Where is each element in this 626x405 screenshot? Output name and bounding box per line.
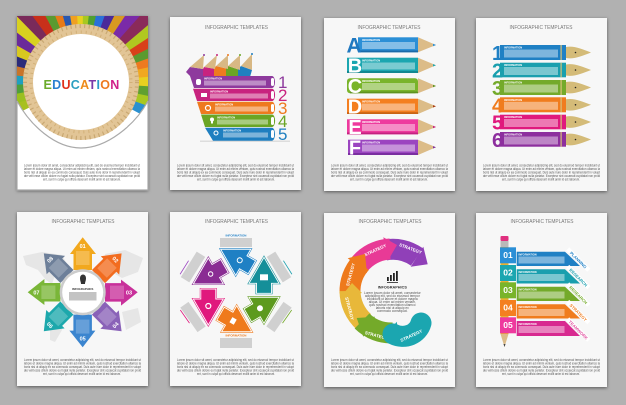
- body text: ent, sunt in culpa qui officia deserunt mollit anim id est laborum.: [43, 372, 121, 376]
- segment purple: STRATEGY: [399, 242, 423, 255]
- pen 2: 2: [492, 60, 503, 82]
- body text: ate velit esse cillum dolore eu fugiat nulla pariatur. Excepteur sint occaecat cupidatat non proid: [24, 174, 140, 178]
- body text: labore et dolore magna aliqua. Ut enim ad minim veniam, quis nostrud exercitation ullamco la: [177, 362, 294, 366]
- body text: [483, 164, 600, 182]
- pencil D: [347, 96, 436, 118]
- panel title: INFOGRAPHIC TEMPLATES: [358, 219, 422, 225]
- pencil tops: [186, 53, 253, 78]
- segment teal: STRATEGY: [400, 328, 423, 343]
- panel title: INFOGRAPHIC TEMPLATES: [358, 25, 421, 31]
- center text: laboris nisi ut aliquip ex: [376, 306, 409, 310]
- pen 4: 4: [492, 95, 504, 117]
- ribbon 2: 02: [503, 268, 513, 278]
- pencil E: INFORMATION: [362, 120, 380, 124]
- segment orange: STRATEGY: [345, 263, 356, 287]
- label RESEARCH green: RESEARCH: [568, 285, 588, 305]
- center circle: INFOGRAPHICS: [72, 287, 94, 291]
- arrow 03: 03: [126, 290, 132, 296]
- panel: C shaped strategy ring: [324, 213, 455, 387]
- panel: radial eight arrows: [17, 212, 148, 386]
- vertical pencil: [500, 236, 508, 347]
- label RESEARCH teal: RESEARCH: [568, 267, 588, 288]
- body text: boris nisi ut aliquip ex ea commodo consequat. Duis aute irure dolor in reprehenderit in volupt: [24, 171, 140, 175]
- ribbon 3: 03: [503, 285, 513, 295]
- pencil E: E: [348, 117, 362, 139]
- pen 6: [492, 130, 591, 152]
- pen 4: [492, 95, 591, 117]
- pencil F: F: [349, 138, 361, 160]
- body text: boris nisi ut aliquip ex ea commodo consequat. Duis aute irure dolor in reprehenderit in volupt: [331, 365, 448, 369]
- body text: [24, 164, 140, 182]
- pencil C: [347, 76, 436, 98]
- white lower area with curved edge: [17, 101, 148, 190]
- panel title: INFOGRAPHIC TEMPLATES: [510, 25, 573, 31]
- ribbon 1: [500, 247, 580, 266]
- body text: [177, 164, 294, 182]
- arrow 05: [69, 315, 95, 347]
- side text right top: [267, 250, 293, 282]
- center text: incididunt ut labore et dolore magna: [367, 297, 418, 301]
- body text: Lorem ipsum dolor sit amet, consectetur adipisicing elit, sed do eiusmod tempor incididunt ut: [177, 164, 294, 168]
- body text: labore et dolore magna aliqua. Ut enim ad minim veniam, quis nostrud exercitation ullamco la: [24, 362, 141, 366]
- pen 2: [492, 60, 591, 82]
- ribbon 2: INFORMATION: [518, 270, 537, 274]
- label PLANNING: PLANNING: [569, 250, 588, 270]
- body text: boris nisi ut aliquip ex ea commodo consequat. Duis aute irure dolor in reprehenderit in volupt: [483, 171, 600, 175]
- arrow 08: [35, 244, 76, 286]
- pen 5: 5: [492, 112, 503, 134]
- pencil D: D: [348, 96, 362, 118]
- panel title: INFOGRAPHIC TEMPLATES: [205, 25, 268, 31]
- body text: Lorem ipsum dolor sit amet, consectetur adipisicing elit, sed do eiusmod tempor incididunt ut: [483, 164, 600, 168]
- body text: Lorem ipsum dolor sit amet, consectetur adipisicing elit, sed do eiusmod tempor incididunt ut: [177, 358, 294, 362]
- arrow 04: 04: [112, 321, 121, 330]
- body text: ent, sunt in culpa qui officia deserunt mollit anim id est laborum.: [43, 178, 121, 182]
- body text: ate velit esse cillum dolore eu fugiat nulla pariatur. Excepteur sint occaecat cupidatat non proid: [331, 174, 448, 178]
- label STRATEGY: STRATEGY: [569, 303, 588, 322]
- colored pencil rays: [17, 16, 148, 114]
- bottom label: [220, 334, 252, 348]
- pencil B: [347, 56, 436, 78]
- bar 2: INFORMATION: [210, 90, 228, 94]
- center text: quis nostrud exercitation ullamco: [369, 303, 416, 307]
- cover title: EDUCATION: EDUCATION: [44, 78, 120, 92]
- pencil A: INFORMATION: [362, 38, 380, 42]
- ribbon 5: INFORMATION: [518, 322, 537, 326]
- pencil F: INFORMATION: [362, 140, 380, 144]
- segment green: [357, 317, 393, 341]
- pencil A: A: [346, 34, 362, 57]
- world map background: [23, 250, 143, 342]
- center text: INFOGRAPHICS: [378, 286, 407, 290]
- center text: [364, 286, 422, 313]
- panel: vertical pencil with ribbons: [476, 213, 607, 387]
- pen 5: [492, 112, 591, 134]
- bar chart icon: [387, 271, 398, 283]
- body text: boris nisi ut aliquip ex ea commodo consequat. Duis aute irure dolor in reprehenderit in volupt: [177, 171, 294, 175]
- arrow 08: 08: [46, 256, 55, 265]
- body text: boris nisi ut aliquip ex ea commodo consequat. Duis aute irure dolor in reprehenderit in volupt: [483, 365, 600, 369]
- arrow 01: [70, 237, 96, 270]
- pen 5: INFORMATION: [504, 115, 522, 119]
- body text: labore et dolore magna aliqua. Ut enim ad minim veniam, quis nostrud exercitation ullamco la: [177, 167, 294, 171]
- body text: Lorem ipsum dolor sit amet, consectetur adipisicing elit, sed do eiusmod tempor incididunt ut: [331, 358, 448, 362]
- label RESEARCH green: [566, 282, 590, 307]
- panel title: INFOGRAPHIC TEMPLATES: [205, 219, 268, 225]
- arrow 07: [28, 279, 60, 305]
- bar 5: 5: [278, 125, 287, 144]
- arrow 03: [105, 280, 138, 306]
- bar 2: 2: [278, 86, 287, 105]
- bar 4: [201, 112, 287, 131]
- body text: labore et dolore magna aliqua. Ut enim ad minim veniam, quis nostrud exercitation ullamco la: [331, 362, 448, 366]
- side text left bottom: [179, 302, 206, 333]
- pen 3: [492, 78, 591, 100]
- bar 2: [193, 86, 287, 105]
- pen 1: INFORMATION: [504, 46, 522, 50]
- arrow blue: [213, 236, 259, 280]
- arrow 06: [34, 299, 76, 340]
- body text: ate velit esse cillum dolore eu fugiat nulla pariatur. Excepteur sint occaecat cupidatat non proid: [331, 368, 448, 372]
- panel title: INFOGRAPHIC TEMPLATES: [510, 219, 574, 225]
- pen 1: [492, 43, 591, 65]
- segment pink: [359, 237, 397, 265]
- bar 5: [205, 125, 287, 144]
- body text: ent, sunt in culpa qui officia deserunt mollit anim id est laborum.: [350, 372, 428, 376]
- ribbon 1: 01: [503, 250, 513, 260]
- arrow purple: [186, 253, 232, 297]
- body text: labore et dolore magna aliqua. Ut enim ad minim veniam, quis nostrud exercitation ullamco la: [331, 167, 448, 171]
- segment green: STRATEGY: [364, 330, 388, 341]
- side text right bottom: [266, 302, 293, 333]
- body text: [331, 358, 448, 376]
- ribbon 5: 05: [503, 320, 513, 330]
- bottom label: INFORMATION: [226, 334, 246, 338]
- pencil C: INFORMATION: [362, 79, 380, 83]
- segment orange: [345, 254, 367, 293]
- center text: aliqua. Ut enim ad minim veniam,: [369, 300, 416, 304]
- pen 3: INFORMATION: [504, 80, 522, 84]
- ribbon 1: INFORMATION: [518, 252, 537, 256]
- arrow pink: [193, 289, 223, 325]
- body text: ate velit esse cillum dolore eu fugiat nulla pariatur. Excepteur sint occaecat cupidatat non proid: [177, 174, 294, 178]
- body text: [24, 358, 141, 376]
- bar 1: [190, 73, 287, 92]
- panel: six arrow cycle: [170, 212, 301, 386]
- arrow 05: 05: [80, 337, 86, 343]
- center circle: [60, 269, 106, 315]
- body text: Lorem ipsum dolor sit amet, consectetur adipisicing elit, sed do eiusmod tempor incididunt ut: [24, 164, 140, 168]
- pencil D: INFORMATION: [362, 100, 380, 104]
- pencil C: C: [348, 76, 362, 98]
- pen 3: 3: [492, 78, 503, 100]
- body text: [177, 358, 294, 376]
- arrow green: [240, 284, 286, 328]
- body text: Lorem ipsum dolor sit amet, consectetur adipisicing elit, sed do eiusmod tempor incididunt ut: [483, 358, 600, 362]
- arrow 02: 02: [110, 256, 119, 265]
- arrow 02: [89, 244, 131, 286]
- label TEAMWORK: TEAMWORK: [568, 319, 589, 341]
- pen 6: INFORMATION: [504, 132, 522, 136]
- ground shadow: [200, 140, 290, 142]
- center text: Lorem ipsum dolor sit amet, consectetur: [364, 291, 422, 295]
- center text: commodo consequat.: [377, 309, 408, 313]
- panel title: INFOGRAPHIC TEMPLATES: [52, 219, 115, 225]
- pen 1: 1: [492, 43, 503, 65]
- pencil ring around circle: [25, 26, 137, 138]
- ribbon 5: [500, 317, 580, 336]
- label STRATEGY: [566, 300, 590, 325]
- arrow 04: [89, 299, 131, 341]
- body text: boris nisi ut aliquip ex ea commodo consequat. Duis aute irure dolor in reprehenderit in volupt: [24, 365, 141, 369]
- arrow teal: [249, 257, 279, 293]
- head icon: [80, 274, 86, 284]
- body text: ent, sunt in culpa qui officia deserunt mollit anim id est laborum.: [502, 372, 580, 376]
- body text: ate velit esse cillum dolore eu fugiat nulla pariatur. Excepteur sint occaecat cupidatat non proid: [24, 368, 141, 372]
- body text: Lorem ipsum dolor sit amet, consectetur adipisicing elit, sed do eiusmod tempor incididunt ut: [24, 358, 141, 362]
- body text: ent, sunt in culpa qui officia deserunt mollit anim id est laborum.: [502, 178, 580, 182]
- segment teal: [388, 322, 423, 346]
- bar 4: 4: [278, 112, 287, 131]
- body text: Lorem ipsum dolor sit amet, consectetur adipisicing elit, sed do eiusmod tempor incididunt ut: [331, 164, 448, 168]
- panel: numbered fountain pens 1 to 6: [476, 18, 607, 191]
- center text: adipisicing elit, sed do eiusmod tempor: [365, 294, 421, 298]
- body text: ent, sunt in culpa qui officia deserunt mollit anim id est laborum.: [350, 178, 428, 182]
- pencil F: [348, 138, 436, 160]
- bar 1: INFORMATION: [204, 76, 222, 80]
- panel: education cover: [15, 15, 150, 193]
- pen 4: INFORMATION: [504, 98, 522, 102]
- arrow 06: 06: [45, 321, 54, 330]
- panel: pencil stack with numbers 1 to 5: [170, 17, 301, 190]
- ribbon 4: [500, 300, 580, 318]
- pencil B: B: [348, 56, 362, 78]
- pencil B: INFORMATION: [362, 58, 380, 62]
- top label: [220, 234, 252, 247]
- bar 3: [197, 99, 287, 118]
- body text: ent, sunt in culpa qui officia deserunt mollit anim id est laborum.: [197, 178, 275, 182]
- panel: lettered pencils A to F: [324, 18, 455, 191]
- bar 4: INFORMATION: [217, 116, 235, 120]
- ribbon 3: [500, 282, 580, 301]
- segment yellow: [340, 283, 364, 322]
- dark inner blocks behind arrows: [39, 249, 126, 336]
- pencil E: [347, 117, 436, 139]
- body text: labore et dolore magna aliqua. Ut enim ad minim veniam, quis nostrud exercitation ullamco la: [483, 167, 600, 171]
- body text: ate velit esse cillum dolore eu fugiat nulla pariatur. Excepteur sint occaecat cupidatat non proid: [483, 368, 600, 372]
- arrow orange: [213, 301, 259, 345]
- bar 3: 3: [278, 99, 287, 118]
- body text: [483, 358, 600, 376]
- arrow 01: 01: [80, 244, 86, 250]
- body text: boris nisi ut aliquip ex ea commodo consequat. Duis aute irure dolor in reprehenderit in volupt: [331, 171, 448, 175]
- bar 3: INFORMATION: [215, 102, 233, 106]
- body text: ate velit esse cillum dolore eu fugiat nulla pariatur. Excepteur sint occaecat cupidatat non proid: [177, 368, 294, 372]
- side text left top: [179, 250, 205, 282]
- bar 5: INFORMATION: [223, 128, 241, 132]
- top label: INFORMATION: [226, 234, 246, 238]
- segment yellow: STRATEGY: [344, 297, 355, 321]
- pen 2: INFORMATION: [504, 63, 522, 67]
- body text: [331, 164, 448, 182]
- bar 1: 1: [278, 73, 287, 92]
- segment pink: STRATEGY: [364, 243, 387, 257]
- ribbon 4: INFORMATION: [518, 305, 537, 309]
- ribbon 3: INFORMATION: [518, 288, 537, 292]
- body text: ent, sunt in culpa qui officia deserunt mollit anim id est laborum.: [197, 372, 275, 376]
- ribbon 2: [500, 265, 580, 284]
- body text: labore et dolore magna aliqua. Ut enim ad minim veniam, quis nostrud exercitation ullamco la: [483, 362, 600, 366]
- body text: boris nisi ut aliquip ex ea commodo consequat. Duis aute irure dolor in reprehenderit in volupt: [177, 365, 294, 369]
- body text: labore et dolore magna aliqua. Ut enim ad minim veniam, quis nostrud exercitation ullamco la: [24, 167, 140, 171]
- body text: ate velit esse cillum dolore eu fugiat nulla pariatur. Excepteur sint occaecat cupidatat non proid: [483, 174, 600, 178]
- segment purple: [385, 242, 428, 267]
- label RESEARCH teal: [566, 265, 590, 290]
- label PLANNING: [566, 247, 590, 272]
- pencil A: [346, 34, 436, 57]
- pen 6: 6: [492, 130, 503, 152]
- arrow 07: 07: [33, 290, 39, 296]
- ribbon 4: 04: [503, 303, 513, 313]
